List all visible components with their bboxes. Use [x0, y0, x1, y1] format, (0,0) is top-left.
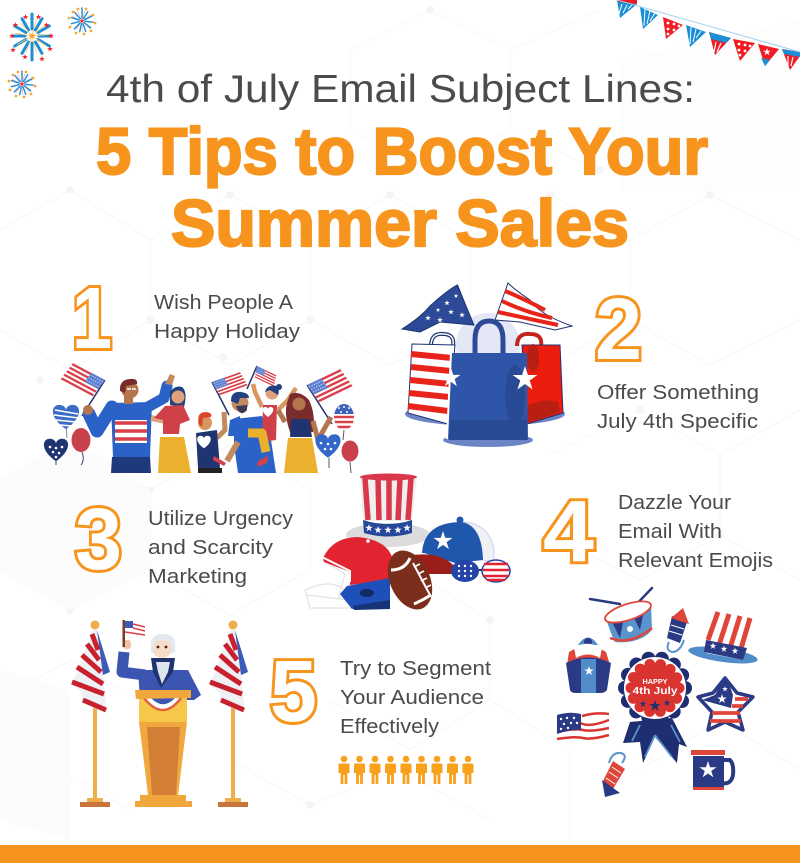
right red bag [517, 334, 563, 424]
tip 4 [543, 483, 773, 580]
rosette scallops [624, 657, 686, 719]
rosette badge [623, 657, 687, 763]
tip 1 [72, 270, 300, 367]
waving flag [557, 712, 609, 745]
title [96, 68, 708, 260]
tip 4 text: Email With [618, 521, 722, 543]
badge text: HAPPY [642, 677, 668, 686]
tip 2 text: July 4th Specific [597, 411, 758, 433]
number 4: 4 [543, 483, 594, 580]
tip 3 text: Marketing [148, 566, 247, 588]
tip 3 text: Utilize Urgency [148, 508, 293, 530]
number 5: 5 [270, 643, 317, 740]
tip 5 text: Effectively [340, 716, 439, 738]
headline line 1: 5 Tips to Boost Your [96, 114, 708, 188]
man in flag sweater [83, 374, 175, 473]
rocket up [667, 608, 689, 652]
child on shoulders [248, 384, 296, 467]
woman in red top [151, 387, 191, 473]
tip 3 text: and Scarcity [148, 537, 273, 559]
balloons left [44, 405, 90, 465]
illustration: hats, helmet, football, sunglasses [305, 474, 510, 616]
tip 5 text: Your Audience [340, 687, 484, 709]
balloons right [315, 403, 358, 473]
small firework top [68, 8, 96, 35]
star and stripe sunglasses [451, 560, 510, 582]
illustration: shopping bags with flags [402, 283, 572, 447]
speaker [122, 620, 201, 700]
flag left navy [402, 285, 474, 332]
mug [691, 750, 733, 790]
man carrying child [227, 392, 276, 473]
right flag pole [210, 620, 248, 807]
rosette badge: 4th July [632, 685, 678, 697]
tip 5 text: Try to Segment [340, 658, 491, 680]
tip 5 [270, 643, 491, 740]
star with flag [698, 678, 753, 730]
number 1: 1 [72, 270, 112, 367]
large firework [9, 14, 54, 61]
woman on right [278, 393, 331, 473]
tip 1 text: Wish People A [154, 292, 294, 314]
boy with heart shirt [196, 412, 226, 473]
illustration: crowd with flags and balloons [44, 363, 359, 473]
uncle sam hat [687, 611, 759, 667]
tip 3 [75, 491, 293, 588]
rocket down [602, 753, 625, 797]
center blue bag [441, 321, 537, 440]
tip 2 text: Offer Something [597, 382, 759, 404]
badge stars [640, 700, 670, 711]
flags held by crowd [60, 363, 353, 424]
flag right stripes [495, 283, 572, 330]
headline line 2: Summer Sales [171, 186, 629, 260]
small firework lower [8, 71, 36, 98]
number 3: 3 [75, 491, 122, 588]
audience icon row [338, 756, 474, 784]
fireworks top left [8, 8, 96, 98]
uncle sam top hat [346, 474, 430, 547]
number 2: 2 [595, 281, 642, 378]
drum [590, 588, 653, 642]
subtitle line: 4th of July Email Subject Lines: [106, 68, 695, 111]
cupcake [566, 638, 611, 693]
podium [135, 690, 192, 807]
left flag pole [72, 620, 110, 807]
tip 4 text: Relevant Emojis [618, 550, 773, 572]
footer bar [0, 845, 800, 863]
bunting top right [610, 0, 800, 70]
american football [379, 544, 441, 616]
baseball cap [408, 516, 494, 574]
raised flag [122, 620, 145, 647]
tip 4 text: Dazzle Your [618, 492, 731, 514]
football helmet [305, 537, 393, 610]
tip 1 text: Happy Holiday [154, 321, 300, 343]
illustration: patriotic icons cluster [557, 588, 759, 797]
tip 2 [595, 281, 759, 433]
illustration: speaker at podium with flags [72, 620, 248, 807]
left striped bag [408, 334, 455, 424]
ribbon tails [623, 718, 687, 763]
